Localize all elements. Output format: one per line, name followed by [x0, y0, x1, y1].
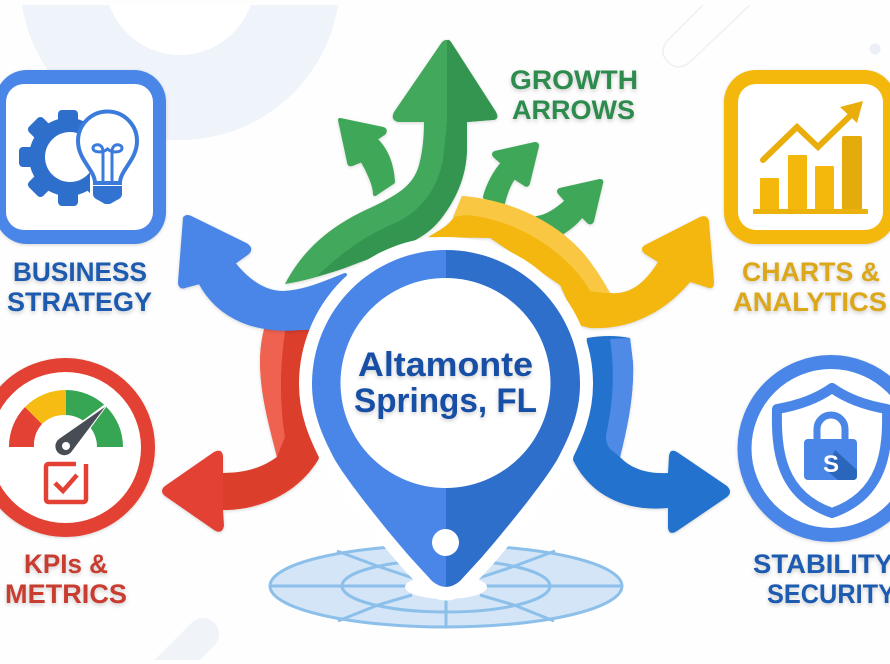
pin right half — [446, 250, 580, 587]
growth arrows label: ARROWS — [512, 95, 635, 125]
charts tile — [724, 70, 890, 244]
icon: trend arrow — [763, 101, 863, 160]
city title — [354, 346, 537, 420]
business strategy tile — [0, 70, 166, 244]
city title: Altamonte — [358, 346, 533, 384]
icon: shield — [777, 388, 887, 513]
icon: padlock — [804, 415, 857, 480]
KPI gauge circle — [0, 365, 148, 530]
big green growth arrow — [285, 40, 497, 284]
background decorative circle — [20, 0, 340, 140]
pin left half — [312, 250, 446, 587]
icon: gear — [19, 110, 90, 206]
business strategy label — [7, 257, 152, 317]
stability circle — [744, 362, 890, 535]
blue arrow to business strategy — [180, 217, 345, 329]
red arrow to KPIs — [162, 326, 325, 532]
icon: light bulb — [78, 112, 137, 204]
KPI label: METRICS — [5, 579, 127, 609]
growth arrows label: GROWTH — [510, 65, 638, 95]
business strategy label: BUSINESS — [13, 257, 147, 287]
KPI label: KPIs & — [24, 549, 108, 579]
KPI label — [5, 549, 127, 609]
pin inner white circle — [340, 278, 550, 488]
charts label — [733, 257, 887, 317]
charts label: ANALYTICS — [733, 287, 887, 317]
small green arrows — [340, 120, 601, 234]
bar chart — [753, 136, 868, 214]
gauge — [9, 390, 123, 455]
location pin — [312, 250, 580, 588]
charts label: CHARTS & — [742, 257, 880, 287]
small arrow right — [537, 181, 601, 234]
business strategy label: STRATEGY — [7, 287, 152, 317]
icon: padlock: S — [823, 451, 839, 478]
map base grid — [270, 545, 622, 627]
city title: Springs, FL — [354, 382, 537, 420]
growth arrows label — [510, 65, 638, 125]
stability label: STABILITY — [753, 549, 890, 579]
pin hole — [432, 529, 459, 556]
yellow arrow to charts and analytics — [428, 196, 714, 328]
icon: checkbox — [46, 464, 86, 502]
stability label — [753, 549, 890, 609]
small arrow left — [340, 120, 393, 194]
small arrow middle — [485, 144, 537, 203]
dark blue arrow to stability and security — [573, 336, 730, 533]
